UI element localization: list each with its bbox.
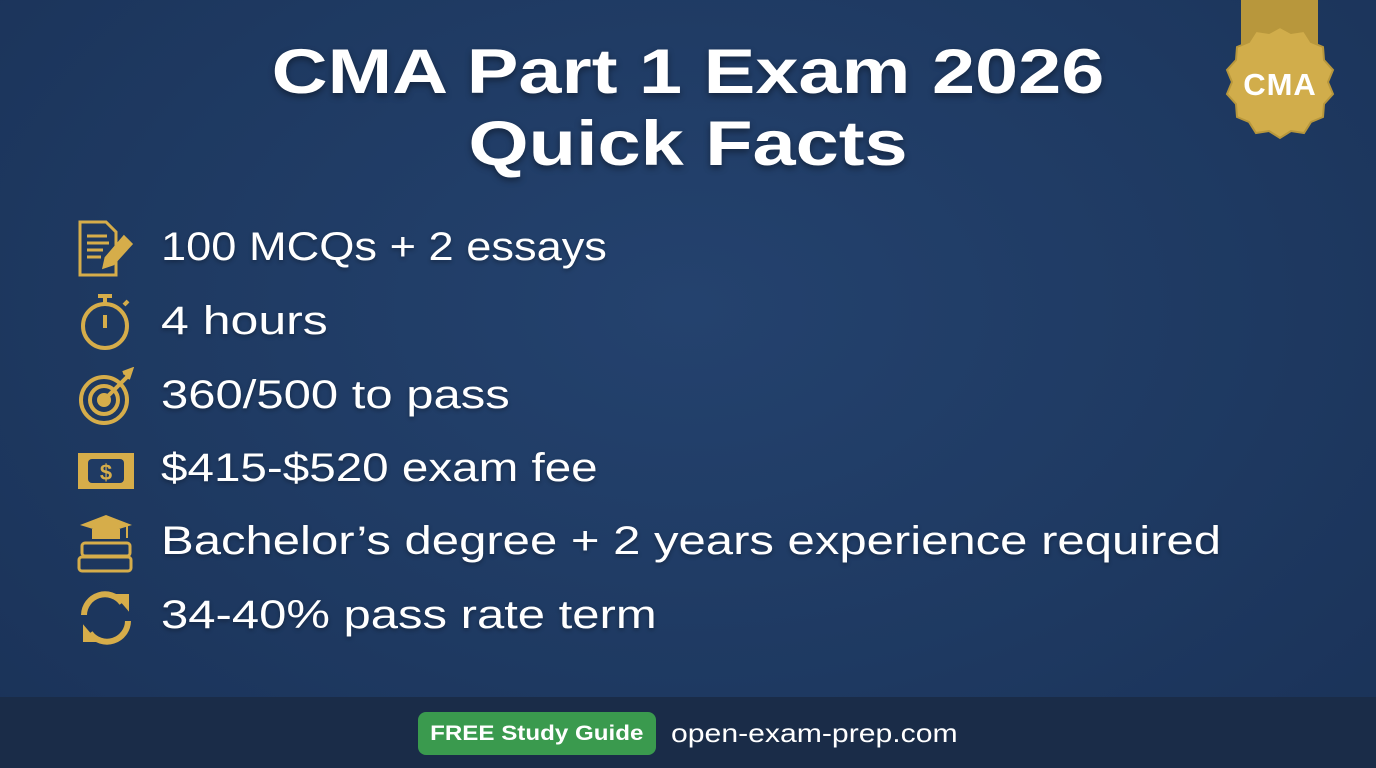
badge: CMA seal	[1226, 0, 1334, 139]
title	[272, 37, 1104, 183]
item: hours: 4 hours	[161, 299, 328, 343]
footer	[0, 697, 1376, 768]
icon: refresh arrows	[81, 591, 131, 645]
icon: money bill	[78, 453, 134, 489]
footer: url: open-exam-prep.com	[671, 718, 958, 748]
item: eligibility: Bachelor’s degree + 2 years experience required	[161, 519, 1221, 563]
icon: target	[79, 367, 134, 425]
title: CMA Part 1 Exam 2026	[272, 37, 1104, 107]
item: hours	[81, 294, 328, 350]
item: questions	[78, 220, 607, 276]
item: passing score	[79, 367, 510, 425]
icon: document pencil	[78, 220, 133, 276]
icon: stopwatch	[81, 294, 130, 350]
footer: study guide pill	[418, 712, 656, 755]
badge: CMA seal: CMA	[1243, 67, 1317, 102]
item: passing score: 360/500 to pass	[161, 373, 510, 417]
title: Quick Facts	[468, 109, 908, 179]
icon: money bill: $	[100, 460, 112, 485]
item: fee: $415-$520 exam fee	[161, 446, 598, 490]
item: questions: 100 MCQs + 2 essays	[161, 225, 607, 269]
item: pass rate: 34-40% pass rate term	[161, 593, 657, 637]
icon: books and cap	[78, 515, 132, 572]
footer: study guide pill: FREE Study Guide	[430, 722, 644, 745]
